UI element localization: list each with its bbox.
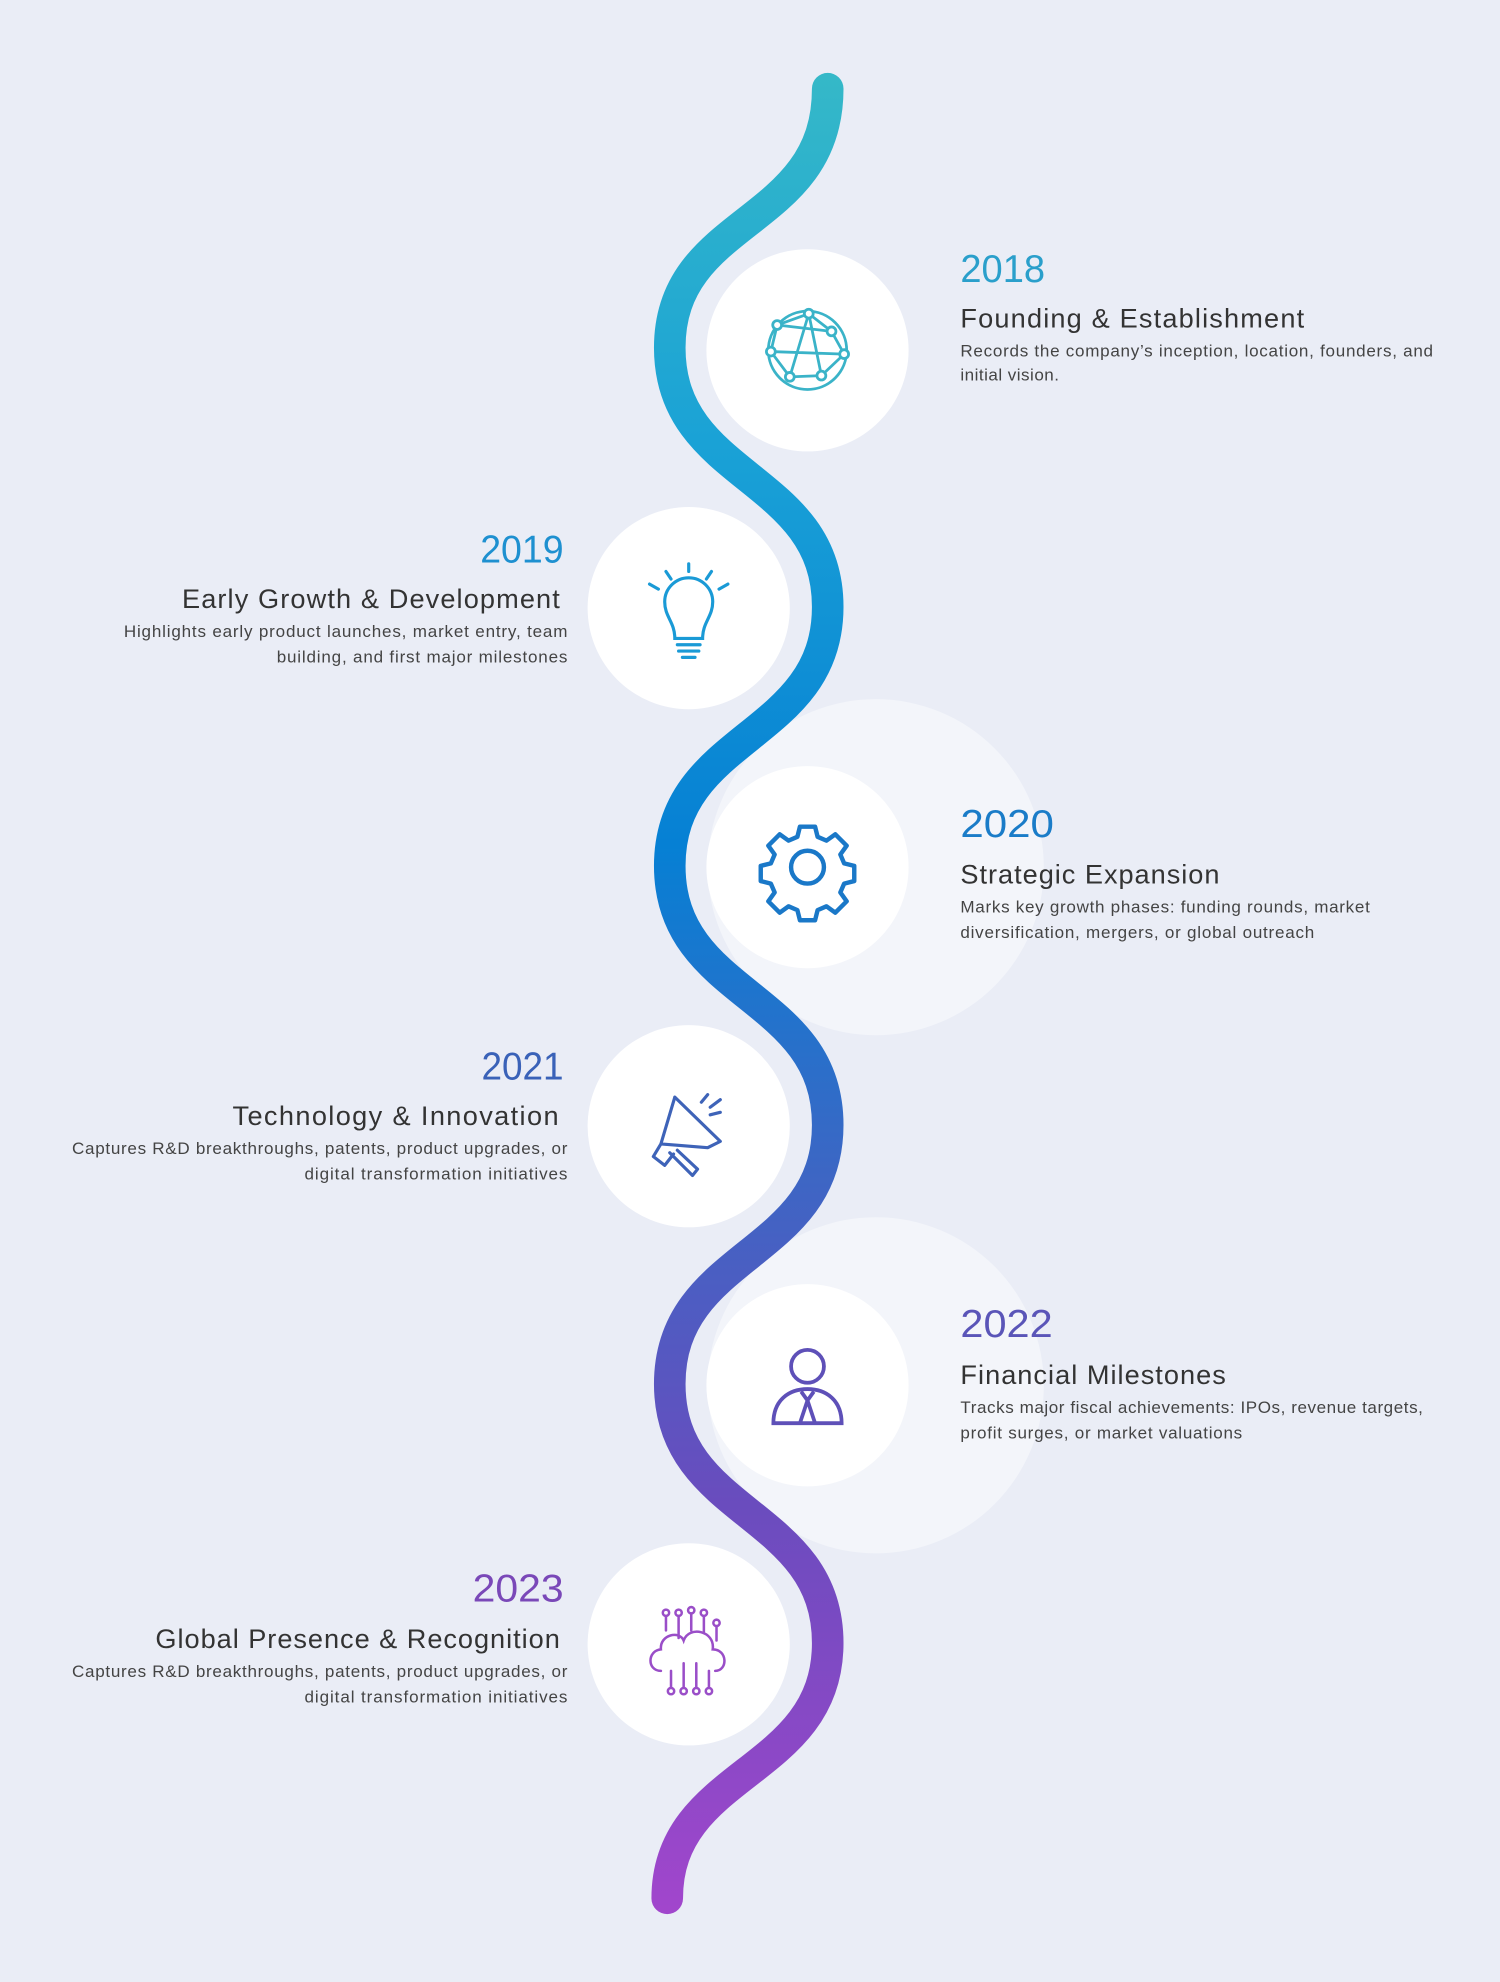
icon: person bbox=[773, 1350, 842, 1423]
text: 2023: Global Presence & Recognition bbox=[155, 1623, 560, 1654]
icon: gear bbox=[761, 827, 854, 920]
text: 2021: Technology & Innovation bbox=[233, 1100, 559, 1131]
text: 2018: Founding & Establishment bbox=[960, 303, 1305, 334]
text: 2021 bbox=[72, 1045, 568, 1183]
timeline wave bbox=[667, 89, 828, 1898]
text: 2023: Captures R&D breakthroughs, patents, product upgrades, or bbox=[72, 1662, 568, 1681]
icon: cloud circuit bbox=[650, 1607, 724, 1694]
text: 2022: Tracks major fiscal achievements: IPOs, revenue targets, bbox=[960, 1398, 1423, 1417]
text: 2019: Highlights early product launches, market entry, team bbox=[124, 622, 567, 641]
text: 2022: 2022 bbox=[960, 1303, 1053, 1346]
icon: light bulb bbox=[650, 564, 728, 657]
milestone circles bbox=[588, 249, 909, 1745]
text: 2018: Records the company’s inception, location, founders, and bbox=[960, 342, 1433, 361]
text: 2020 bbox=[960, 803, 1370, 942]
text: 2019: building, and first major milestones bbox=[277, 647, 567, 666]
text: 2018: initial vision. bbox=[960, 366, 1059, 385]
text: 2021: Captures R&D breakthroughs, patents, product upgrades, or bbox=[72, 1139, 568, 1158]
text: 2022: profit surges, or market valuations bbox=[960, 1423, 1242, 1442]
text: 2018 bbox=[960, 248, 1433, 385]
text: 2020: Strategic Expansion bbox=[960, 859, 1219, 890]
text: 2023: 2023 bbox=[473, 1567, 564, 1610]
text: 2021: 2021 bbox=[481, 1045, 564, 1088]
text: 2019: 2019 bbox=[480, 529, 564, 572]
faint halo circles bbox=[708, 699, 1044, 1553]
text: 2020: diversification, mergers, or global outreach bbox=[960, 923, 1314, 942]
text: 2019 bbox=[124, 529, 567, 666]
text: 2022 bbox=[960, 1303, 1423, 1442]
text: 2022: Financial Milestones bbox=[960, 1359, 1226, 1390]
text: 2023 bbox=[72, 1567, 568, 1706]
text: 2020: 2020 bbox=[960, 803, 1054, 846]
text: 2023: digital transformation initiatives bbox=[305, 1687, 567, 1706]
icon: megaphone bbox=[653, 1095, 720, 1175]
icon: globe network bbox=[766, 309, 849, 389]
text: 2021: digital transformation initiatives bbox=[305, 1164, 567, 1183]
text: 2018: 2018 bbox=[960, 248, 1045, 291]
text: 2019: Early Growth & Development bbox=[182, 583, 560, 614]
text: 2020: Marks key growth phases: funding rounds, market bbox=[960, 898, 1370, 917]
